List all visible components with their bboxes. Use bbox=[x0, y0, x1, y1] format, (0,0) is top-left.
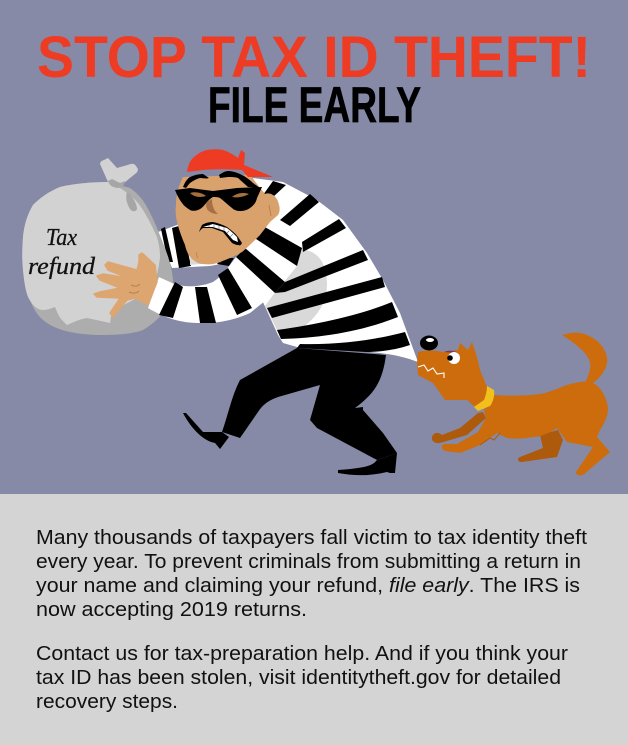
paragraph 1: now accepting 2019 returns. bbox=[36, 599, 307, 621]
hand bbox=[94, 253, 157, 317]
money bag bbox=[22, 158, 173, 335]
collar bbox=[474, 386, 494, 411]
paragraph 1 bbox=[36, 527, 587, 621]
paragraph 1: every year. To prevent criminals from submitting a return in bbox=[36, 551, 581, 573]
dog fur bbox=[480, 433, 500, 445]
paragraph 2 bbox=[36, 643, 568, 713]
dog nose bbox=[420, 336, 438, 350]
dog tail bbox=[562, 333, 607, 383]
dog far legs bbox=[432, 412, 486, 443]
info panel bbox=[0, 494, 628, 745]
ear detail bbox=[269, 205, 271, 216]
mask bbox=[175, 187, 262, 211]
striped shirt bbox=[148, 178, 418, 362]
bag tie bbox=[100, 158, 138, 188]
chin fold bbox=[197, 252, 198, 258]
dog head bbox=[417, 342, 490, 407]
bandana bbox=[187, 149, 273, 177]
eyebrows bbox=[183, 174, 209, 188]
chest behind head bbox=[158, 222, 234, 268]
dog eye bbox=[444, 351, 460, 356]
nose bbox=[206, 199, 218, 214]
paragraph 2: tax ID has been stolen, visit identitytheft.gov for detailed bbox=[36, 667, 561, 689]
subtitle: FILE EARLY bbox=[208, 77, 421, 133]
title: STOP TAX ID THEFT! bbox=[37, 25, 591, 90]
paragraph 2: Contact us for tax-preparation help. And if you think your bbox=[36, 643, 568, 665]
bag label: Tax bbox=[46, 225, 77, 251]
paragraph 1: your name and claiming your refund, file early . The IRS is bbox=[36, 575, 580, 597]
trousers and shoes bbox=[183, 348, 397, 475]
illustration: dog bbox=[417, 333, 610, 475]
dog body bbox=[442, 382, 610, 475]
mouth bbox=[199, 222, 242, 245]
money bag: refund bbox=[28, 254, 96, 280]
head bbox=[175, 149, 280, 264]
illustration: thief with bag bbox=[22, 149, 418, 475]
arm sleeve bbox=[148, 226, 302, 323]
paragraph 2: recovery steps. bbox=[36, 691, 178, 713]
paragraph 1: Many thousands of taxpayers fall victim to tax identity theft bbox=[36, 527, 587, 549]
dog teeth bbox=[418, 365, 444, 378]
